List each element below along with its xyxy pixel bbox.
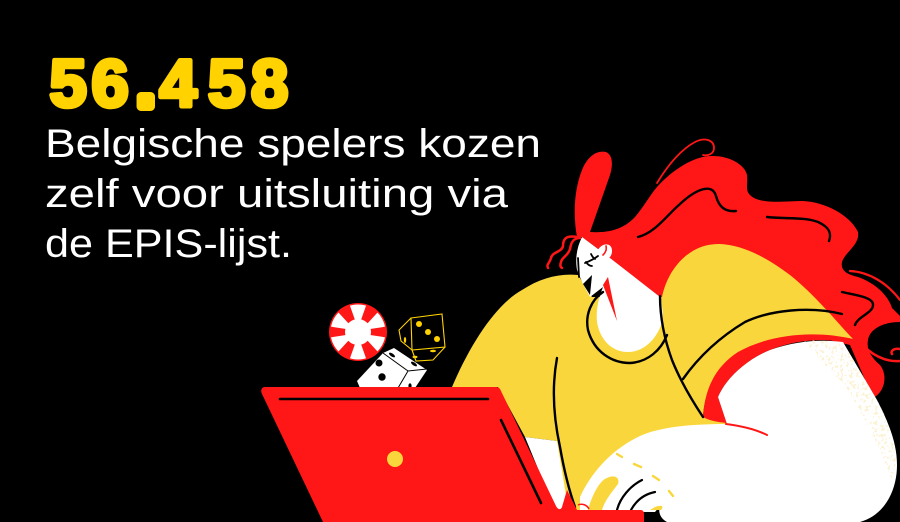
big number: 8 (251, 46, 288, 122)
white arm (580, 341, 897, 522)
laptop (261, 387, 644, 522)
hand (578, 454, 673, 510)
mouth (583, 275, 592, 295)
red sleeve trim (703, 334, 853, 423)
big number: 4 (160, 46, 197, 122)
body yellow (452, 244, 853, 512)
red arm crease (726, 424, 767, 435)
big number: 5 (208, 46, 245, 122)
necklace (587, 292, 667, 363)
big number: 5 (50, 46, 87, 122)
white sleeve (525, 437, 566, 510)
description text (45, 122, 541, 266)
description text: Belgische spelers kozen (45, 122, 541, 166)
illustration: woman gambling on laptop (261, 140, 900, 522)
laptop logo dot (387, 451, 403, 467)
hair (547, 140, 900, 398)
arm speckle shading (803, 340, 896, 480)
description text: de EPIS-lijst. (45, 222, 292, 266)
description text: zelf voor uitsluiting via (45, 172, 509, 216)
big number: 6 (92, 46, 129, 122)
hair strands (547, 140, 900, 361)
torso lines (554, 296, 842, 507)
eye (578, 254, 598, 277)
poker chip (328, 303, 388, 361)
hair lines (638, 189, 873, 325)
head and neck (576, 237, 667, 363)
big number: . (136, 46, 155, 122)
yellow outlined die (399, 314, 445, 361)
red hair lock on neck (603, 277, 617, 321)
white die (357, 348, 427, 389)
ear (597, 244, 612, 259)
